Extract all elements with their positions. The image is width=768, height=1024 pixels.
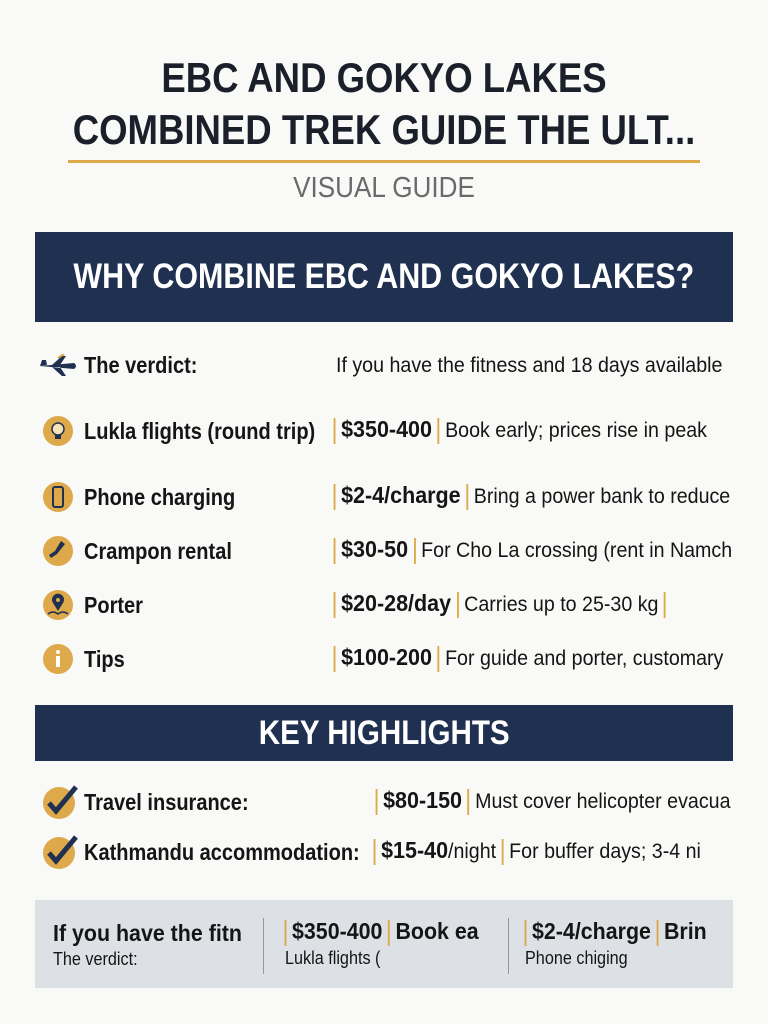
summary: phone: $2-4/charge Brin — [532, 918, 707, 944]
summary: verdict: If you have the fitn — [53, 920, 242, 946]
title underline — [68, 160, 700, 163]
row: phone — [43, 482, 730, 512]
icon: crampon — [43, 536, 73, 566]
highlight: insurance — [43, 785, 731, 819]
row: crampon — [43, 536, 732, 566]
title — [73, 54, 695, 153]
summary: lukla: Lukla flights ( — [285, 948, 380, 968]
row: tips: Tips — [84, 646, 125, 672]
highlight: insurance: Travel insurance: — [84, 789, 249, 815]
highlight: kathmandu: Kathmandu accommodation: — [84, 839, 360, 865]
row: tips: $100-200 For guide and porter, customary — [341, 644, 723, 670]
row: lukla — [43, 416, 707, 446]
row: crampon: $30-50 For Cho La crossing (rent in Namch — [341, 536, 732, 562]
row: verdict — [40, 352, 722, 378]
summary: verdict: The verdict: — [53, 949, 138, 969]
banner: key highlights — [35, 705, 733, 761]
icon: info — [43, 644, 73, 674]
banner: why combine — [35, 232, 733, 322]
highlight: kathmandu: $15-40/night For buffer days; 3-4 ni — [381, 837, 701, 863]
icon: check — [43, 837, 75, 869]
title: EBC AND GOKYO LAKES — [161, 54, 607, 101]
row: porter: $20-28/day Carries up to 25-30 kg — [341, 590, 658, 616]
subtitle: VISUAL GUIDE — [293, 172, 475, 204]
summary: phone: Phone chiging — [525, 948, 628, 968]
icon: check — [43, 787, 75, 819]
row: verdict: The verdict: — [84, 352, 197, 378]
row: crampon: Crampon rental — [84, 538, 232, 564]
icon: bulb — [43, 416, 73, 446]
banner: why combine: WHY COMBINE EBC AND GOKYO LAKES? — [74, 257, 694, 296]
row: lukla: $350-400 Book early; prices rise in peak — [341, 416, 707, 442]
summary: phone — [524, 918, 707, 968]
row: porter: Porter — [84, 592, 143, 618]
summary: lukla — [284, 918, 479, 968]
title: COMBINED TREK GUIDE THE ULT... — [73, 106, 695, 153]
row: phone: Phone charging — [84, 484, 235, 510]
highlight: insurance: $80-150 Must cover helicopter evacua — [383, 787, 731, 813]
highlight: kathmandu — [43, 835, 701, 869]
footer summary — [35, 900, 733, 988]
row: verdict: If you have the fitness and 18 days available — [336, 354, 722, 377]
row: phone: $2-4/charge Bring a power bank to reduce — [341, 482, 730, 508]
icon: phone — [43, 482, 73, 512]
row: tips — [43, 644, 724, 674]
row: porter — [43, 590, 666, 620]
icon: pin — [43, 590, 73, 620]
banner: key highlights: KEY HIGHLIGHTS — [259, 714, 509, 752]
row: lukla: Lukla flights (round trip) — [84, 418, 315, 444]
summary: verdict — [53, 920, 242, 969]
summary: lukla: $350-400 Book ea — [292, 918, 479, 944]
icon: plane — [40, 354, 76, 376]
